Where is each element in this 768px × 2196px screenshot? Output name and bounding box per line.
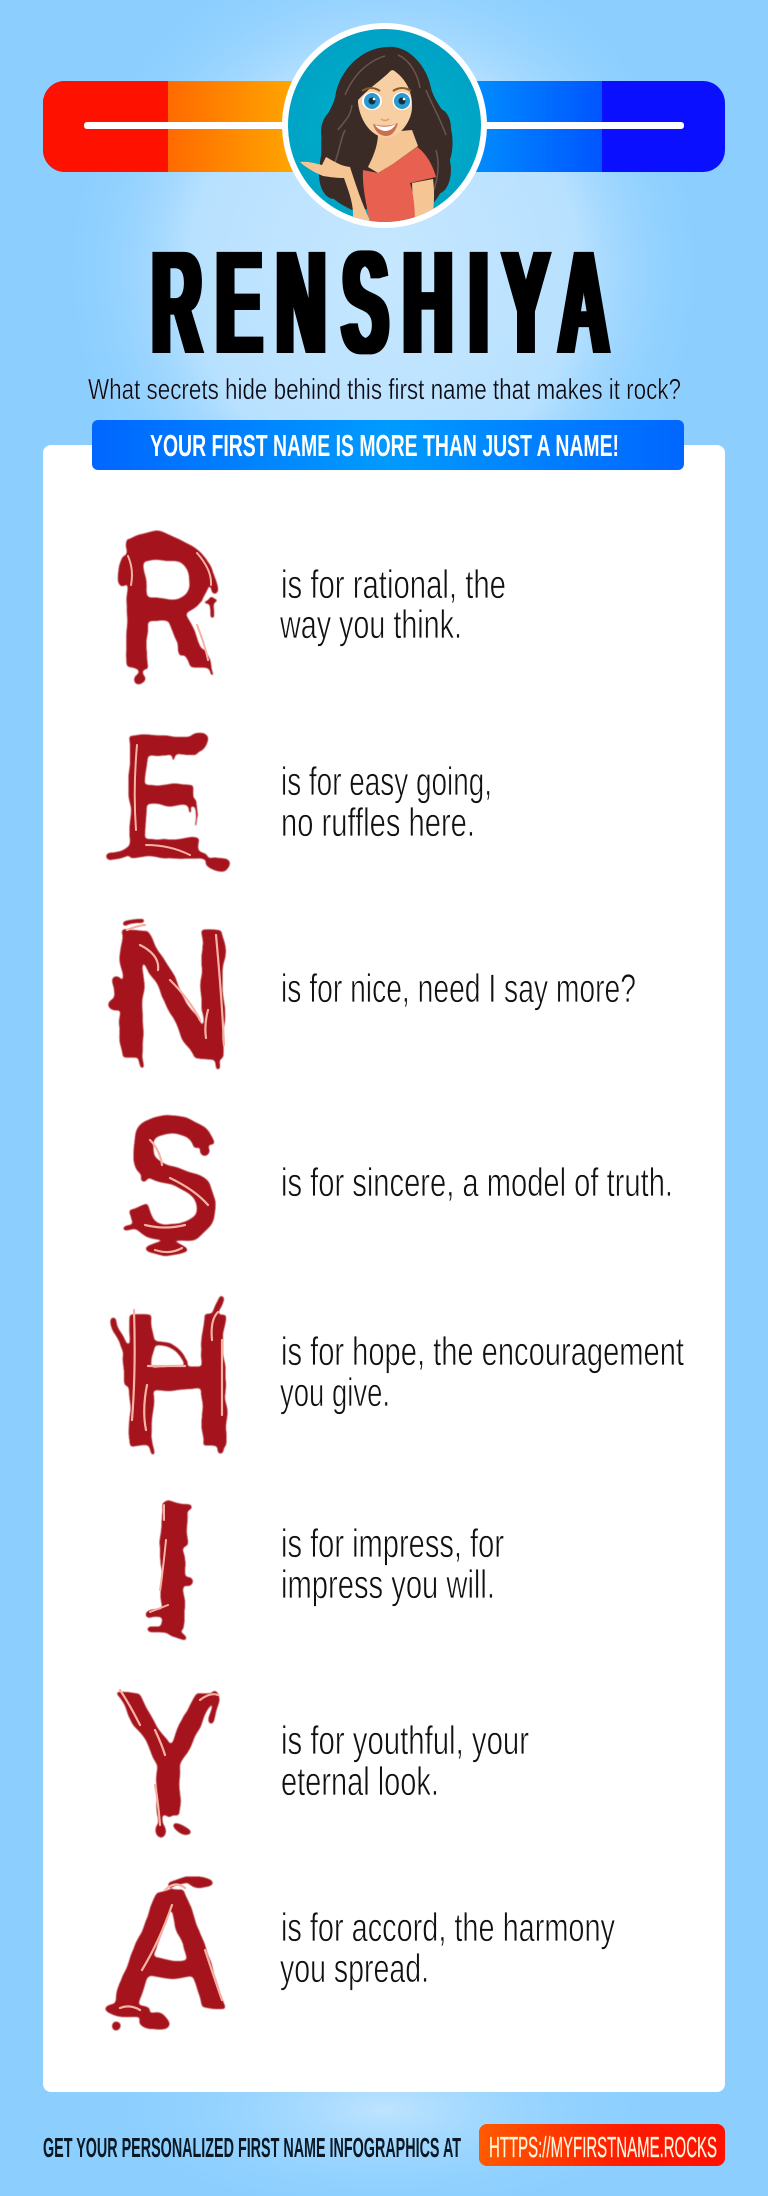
avatar portrait [282,23,487,228]
row I text: is for impress, for [281,1522,504,1566]
letter N: N [109,891,235,1098]
row H text: you give. [280,1371,390,1415]
row A text: you spread. [280,1947,429,1991]
row A text [280,1906,615,1991]
row R text: is for rational, the [281,563,506,607]
row I text: impress you will. [281,1563,495,1607]
letter R: R [118,500,215,708]
row I text [281,1522,504,1607]
row Y text: is for youthful, your [281,1719,529,1763]
white content panel [43,445,725,2092]
footer url button [479,2124,725,2166]
row Y text [281,1719,529,1804]
row R text [279,563,506,647]
header gradient bar [43,81,725,172]
row A text: is for accord, the harmony [281,1906,615,1950]
row R text: way you think. [279,603,462,647]
letter A: A [108,1853,232,2045]
row Y text: eternal look. [281,1760,439,1804]
letter I: I [150,1462,194,1670]
letter E: E [120,697,205,896]
row E text: no ruffles here. [281,801,475,845]
row E text: is for easy going, [281,760,492,804]
letter S: S [122,1079,223,1279]
tagline banner [92,420,684,470]
letter H: H [118,1272,236,1489]
row E text [281,760,492,845]
letter Y: Y [113,1654,223,1853]
row H text [280,1330,684,1415]
title: RENSHIYA [152,221,609,385]
